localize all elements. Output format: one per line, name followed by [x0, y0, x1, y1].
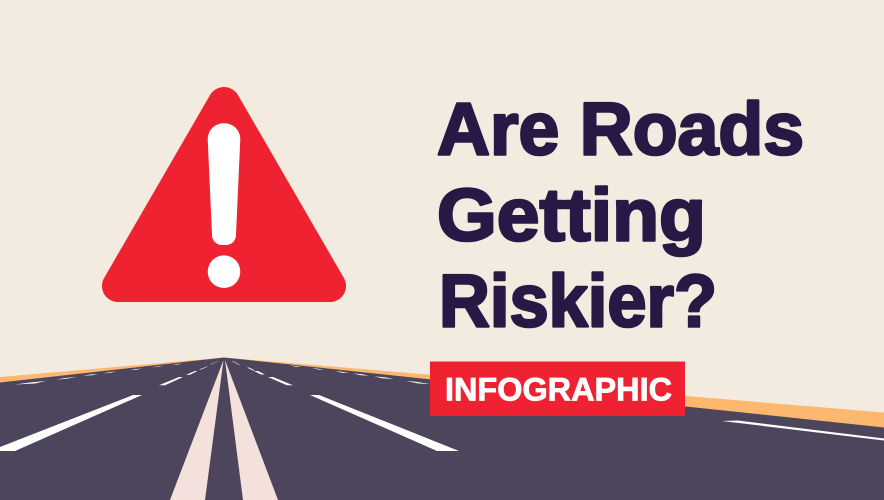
- infographic badge: INFOGRAPHIC: [445, 372, 672, 408]
- white lane markings: [0, 361, 884, 451]
- road scene: [0, 358, 884, 500]
- road shoulder: [0, 358, 884, 428]
- exclamation dot: [208, 255, 240, 288]
- title: [437, 88, 804, 342]
- title: Riskier?: [439, 260, 717, 342]
- infographic badge: [430, 362, 685, 416]
- exclamation stem: [208, 123, 240, 245]
- road surface: [0, 358, 884, 500]
- title: Are Roads: [437, 88, 804, 170]
- title: Getting: [437, 174, 706, 256]
- triangle body: [102, 87, 346, 302]
- centre double line: [170, 360, 278, 500]
- icon: warning triangle: [102, 87, 346, 302]
